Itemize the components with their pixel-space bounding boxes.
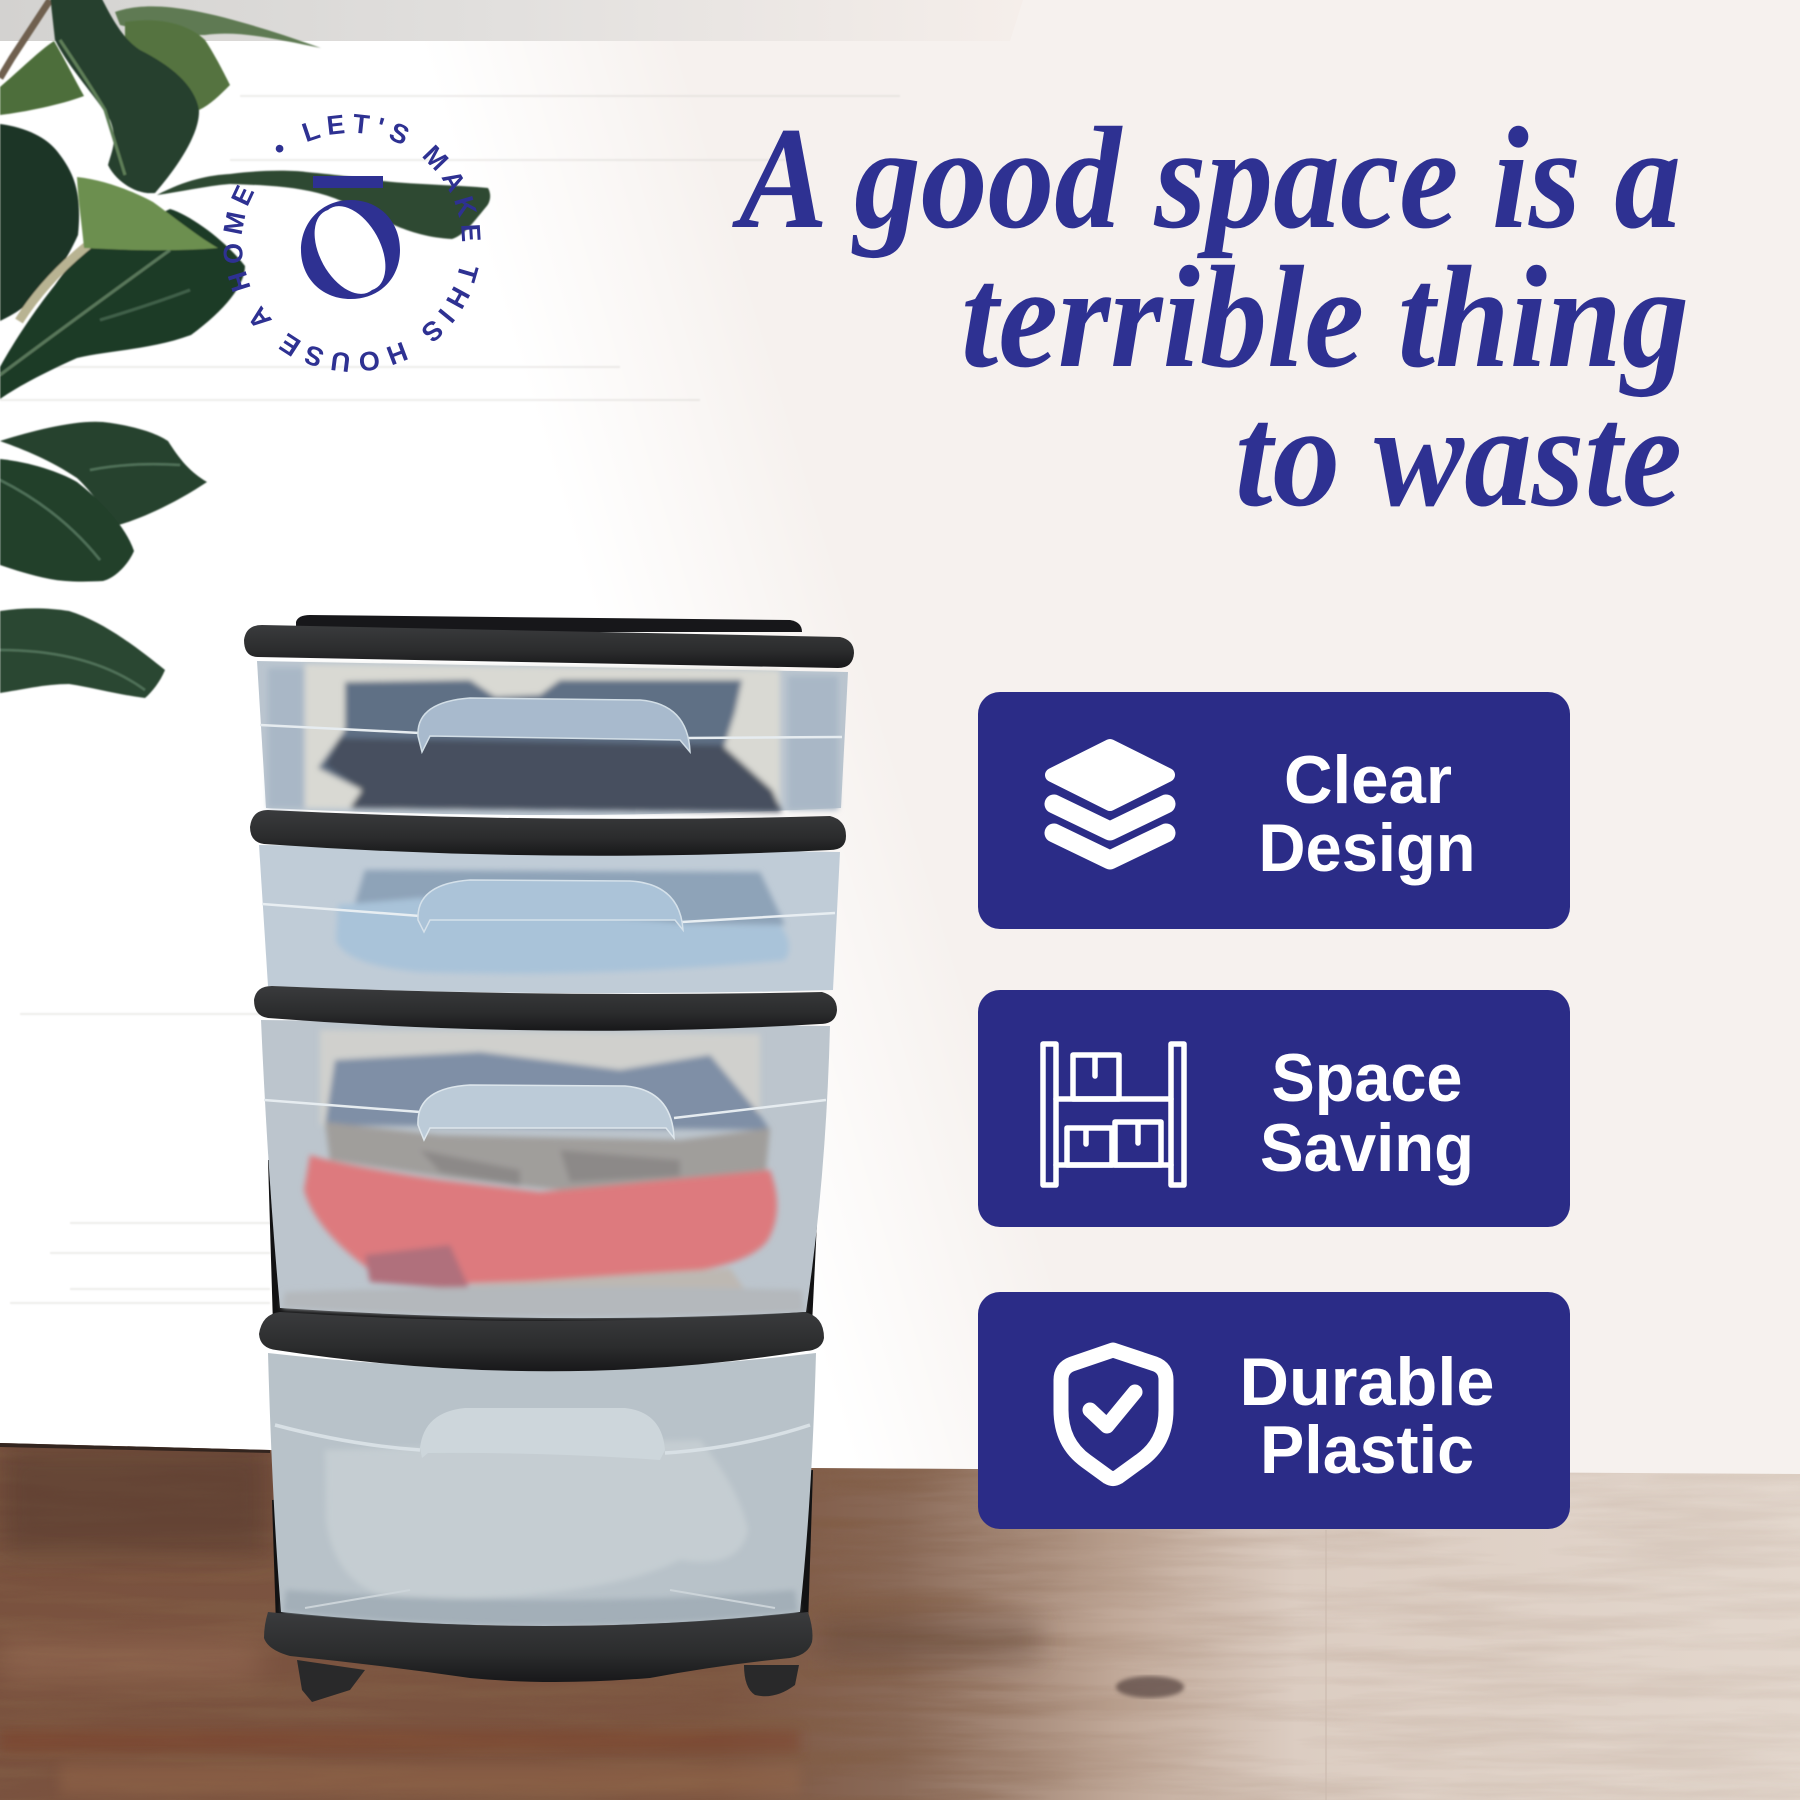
feature card: space saving [978,990,1570,1227]
card label: Design [1258,810,1476,886]
logo badge [223,114,481,372]
icon: shield with check [1061,1350,1166,1478]
black rim 2 [250,810,846,856]
logo mark [301,176,400,299]
logo circular text: • LET'S MAKE THIS HOUSE A HOME [223,114,481,372]
rear black frame [268,1160,820,1625]
headline: A good space is a [732,97,1681,259]
card label [1258,742,1476,886]
drawer 1 handle [418,698,690,752]
black base [264,1612,812,1682]
drawer 3 handle [418,1085,674,1140]
drawer 2 handle [418,880,683,932]
drawer 4 handle [420,1408,665,1460]
card background [978,990,1570,1227]
card label: Durable [1240,1344,1494,1420]
drawer 3 with folded clothes [261,1020,830,1318]
card background [978,692,1570,929]
headline [732,97,1689,537]
card label: Clear [1284,742,1452,818]
black rim 4 [259,1312,824,1371]
houseplant leaves [0,0,490,698]
feature card: durable plastic [978,1292,1570,1529]
plastic storage drawer tower [244,615,854,1702]
top lid [296,615,802,632]
card label: Plastic [1260,1412,1474,1488]
drawer 2 [259,845,840,993]
wooden floor [0,1440,1800,1800]
casters [297,1660,799,1702]
card label [1260,1040,1474,1186]
drawer 4 [268,1353,816,1626]
card label: Saving [1260,1110,1474,1186]
headline: terrible thing [961,236,1689,398]
black rim 3 [254,986,837,1031]
feature card: clear design [978,692,1570,929]
card label [1240,1344,1494,1488]
icon: storage shelf with boxes [1043,1044,1184,1185]
card label: Space [1272,1040,1462,1116]
icon: stacked layers [1052,746,1168,860]
card background [978,1292,1570,1529]
black rim 1 [244,625,854,668]
headline: to waste [1235,375,1682,537]
drawer 1 [257,661,848,815]
